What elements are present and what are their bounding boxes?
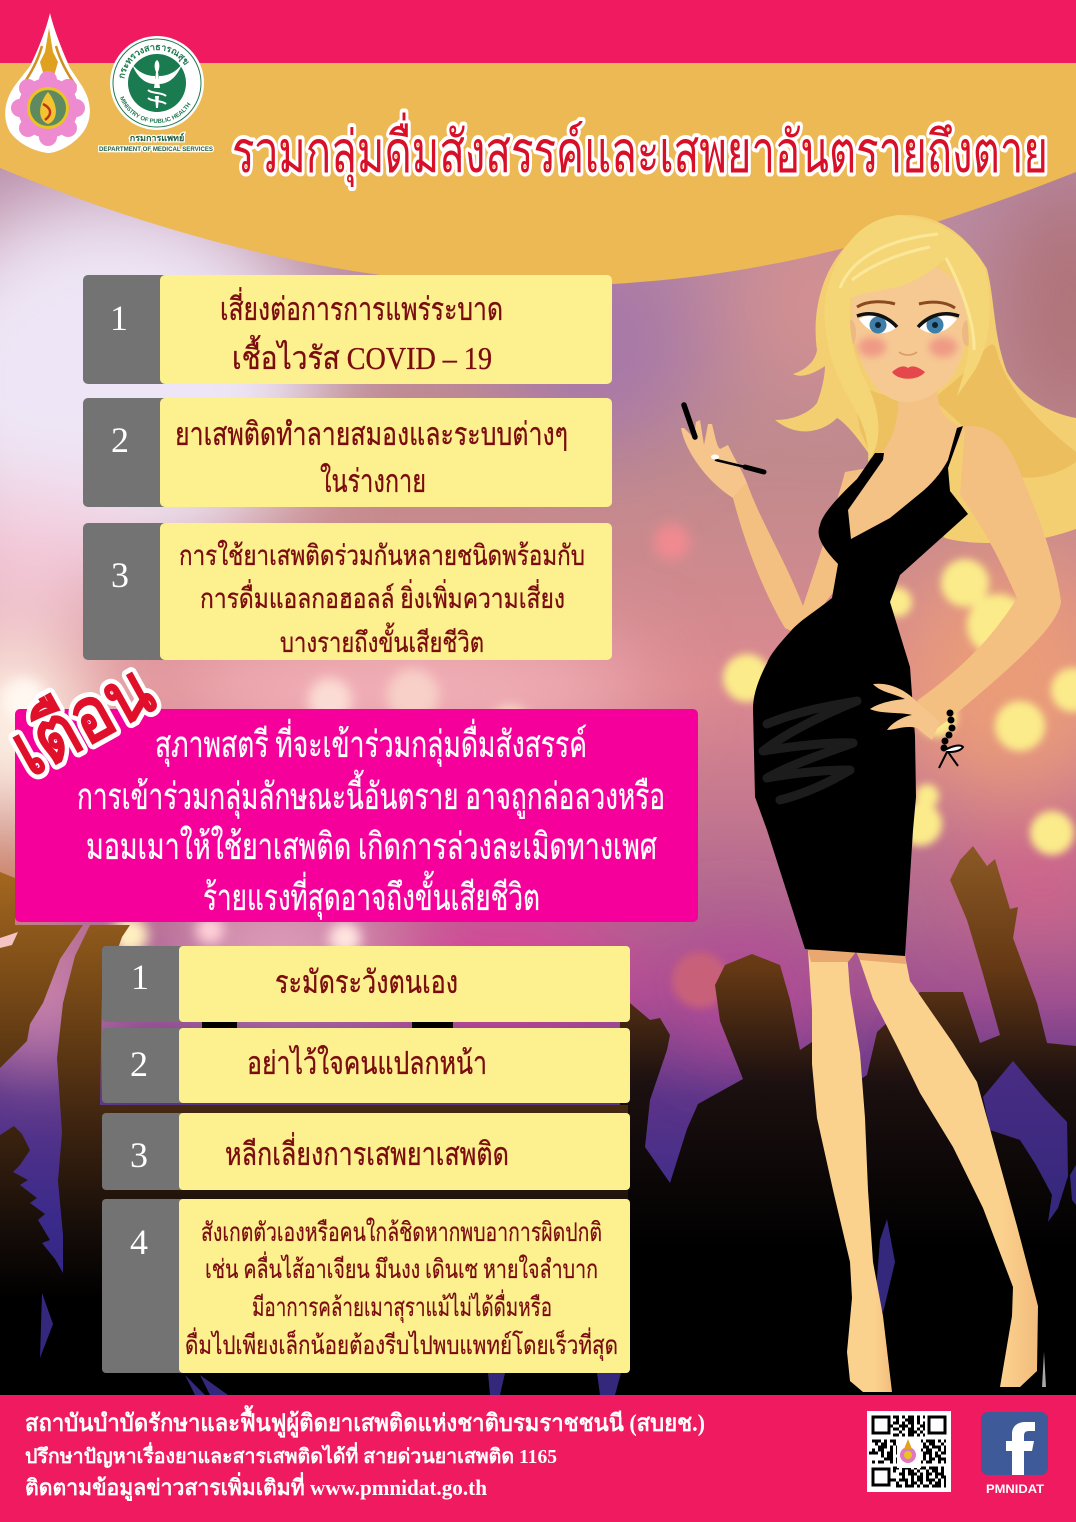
- right arm on hip: [917, 426, 1061, 730]
- stiletto heel: [1042, 1352, 1046, 1387]
- footer band: [0, 1395, 1076, 1522]
- panel: risk 2: ยาเสพติดทำลายสมองและระบบต่างๆ: [175, 416, 568, 452]
- illustration: woman in black dress: [681, 215, 1076, 1392]
- panel: advice 1: [102, 946, 630, 1022]
- panel: risk 1: เชื้อไวรัส COVID – 19: [232, 335, 492, 376]
- footer contact text: ติดตามข้อมูลข่าวสารเพิ่มเติมที่ www.pmnidat.go.th: [25, 1471, 487, 1502]
- panel: risk 3: การดื่มแอลกอฮอลล์ ยิ่งเพิ่มความเสี่ยง: [200, 579, 565, 615]
- eyes: [857, 302, 959, 334]
- raised hand: [681, 420, 747, 498]
- panel: advice 1: 1: [131, 957, 149, 997]
- panel: warning: มอมเมาให้ใช้ยาเสพติด เกิดการล่วงละเมิดทางเพศ: [86, 825, 657, 868]
- panel: advice 4: มีอาการคล้ายเมาสุราแม้ไม่ได้ดื่มหรือ: [252, 1289, 552, 1323]
- logo: Ministry of Public Health: กรมการแพทย์: [130, 132, 184, 143]
- footer contact text: สถาบันบำบัดรักษาและฟื้นฟูผู้ติดยาเสพติดแห่งชาติบรมราชชนนี (สบยช.): [25, 1404, 705, 1438]
- hair highlights: [840, 234, 974, 350]
- panel: advice 4: เช่น คลื่นไส้อาเจียน มึนงง เดินเซ หายใจลำบาก: [205, 1251, 598, 1284]
- panel: risk 1: 1: [110, 298, 128, 338]
- hair shadow right: [933, 345, 1076, 478]
- panel: warning: [15, 709, 698, 922]
- panel: risk 3: [83, 523, 612, 660]
- panel: advice 4: ดื่มไปเพียงเล็กน้อยต้องรีบไปพบแพทย์โดยเร็วที่สุด: [185, 1327, 618, 1361]
- panel: advice 1: ระมัดระวังตนเอง: [275, 964, 458, 1000]
- logo: institute emblem: [5, 13, 90, 153]
- front hair: [825, 215, 989, 462]
- QR centre emblem: [897, 1438, 921, 1468]
- panel: advice 2: อย่าไว้ใจคนแปลกหน้า: [247, 1045, 487, 1081]
- panel: warning: สุภาพสตรี ที่จะเข้าร่วมกลุ่มดื่มสังสรรค์: [155, 718, 587, 767]
- Facebook icon: PMNIDAT: [986, 1482, 1045, 1496]
- panel: risk 1: เสี่ยงต่อการการแพร่ระบาด: [220, 287, 503, 327]
- right leg: [857, 952, 1038, 1387]
- panel: advice 4: [102, 1199, 630, 1373]
- footer contact text: [25, 1404, 705, 1502]
- panel: risk 2: 2: [111, 420, 129, 460]
- QR code: [867, 1411, 951, 1492]
- panel: warning: การเข้าร่วมกลุ่มลักษณะนี้อันตราย อาจถูกล่อลวงหรือ: [77, 769, 665, 819]
- back hair: [775, 215, 1076, 543]
- neck and chest: [840, 385, 965, 545]
- cheeks: [858, 337, 957, 357]
- header gold curve: [0, 63, 1076, 286]
- Facebook icon: [981, 1412, 1048, 1496]
- panel: risk 1: [83, 275, 612, 384]
- left arm with raised hand: [733, 468, 868, 635]
- logo: Ministry of Public Health: MINISTRY OF PUBLIC HEALTH: [120, 96, 191, 123]
- left leg: [808, 951, 892, 1392]
- nose: [899, 352, 917, 355]
- logo: Ministry of Public Health: DEPARTMENT OF MEDICAL SERVICES: [99, 147, 213, 153]
- panel: warning: ร้ายแรงที่สุดอาจถึงขั้นเสียชีวิต: [203, 870, 540, 920]
- cigarette holder: [684, 405, 764, 472]
- ears: [846, 320, 972, 346]
- logo: Ministry of Public Health: กระทรวงสาธารณสุข: [120, 44, 189, 78]
- panel: risk 3: บางรายถึงขั้นเสียชีวิต: [280, 622, 484, 659]
- dress wrinkles: [763, 701, 857, 800]
- bracelet: [939, 710, 963, 768]
- panel: risk 2: [83, 398, 612, 507]
- black dress: [753, 426, 968, 956]
- panel: advice 2: 2: [130, 1044, 148, 1084]
- hand on hip: [870, 684, 940, 740]
- panel: risk 2: ในร่างกาย: [320, 463, 426, 499]
- crowd silhouettes: [0, 846, 1076, 1395]
- crowd bits between panels: [202, 1020, 453, 1030]
- hair shadow neck: [853, 385, 900, 460]
- panel: advice 3: 3: [130, 1135, 148, 1175]
- crowd right side: [620, 846, 1076, 1395]
- crowd gap right: [983, 1061, 1068, 1222]
- logo: Ministry of Public Health: [98, 36, 214, 153]
- crowd left figures: [0, 872, 83, 1068]
- panel: advice 3: หลีกเลี่ยงการเสพยาเสพติด: [225, 1132, 509, 1172]
- lips: [892, 366, 925, 379]
- panel: advice 4: สังเกตตัวเองหรือคนใกล้ชิดหากพบอาการผิดปกติ: [201, 1218, 602, 1247]
- face: [852, 262, 967, 402]
- panel: advice 3: [102, 1113, 630, 1190]
- panel: advice 2: [102, 1028, 630, 1103]
- panel: risk 3: 3: [111, 555, 129, 595]
- QR finder squares: [873, 1417, 945, 1485]
- footer contact text: ปรึกษาปัญหาเรื่องยาและสารเสพติดได้ที่ สายด่วนยาเสพติด 1165: [25, 1441, 557, 1468]
- panel: risk 3: การใช้ยาเสพติดร่วมกันหลายชนิดพร้อมกับ: [179, 539, 585, 572]
- warning stamp: เตือน: [0, 648, 168, 793]
- header band: [0, 0, 1076, 63]
- hem shadow: [808, 950, 906, 964]
- panel: advice 4: 4: [130, 1222, 148, 1262]
- crowd gap between legs: [876, 1165, 1076, 1313]
